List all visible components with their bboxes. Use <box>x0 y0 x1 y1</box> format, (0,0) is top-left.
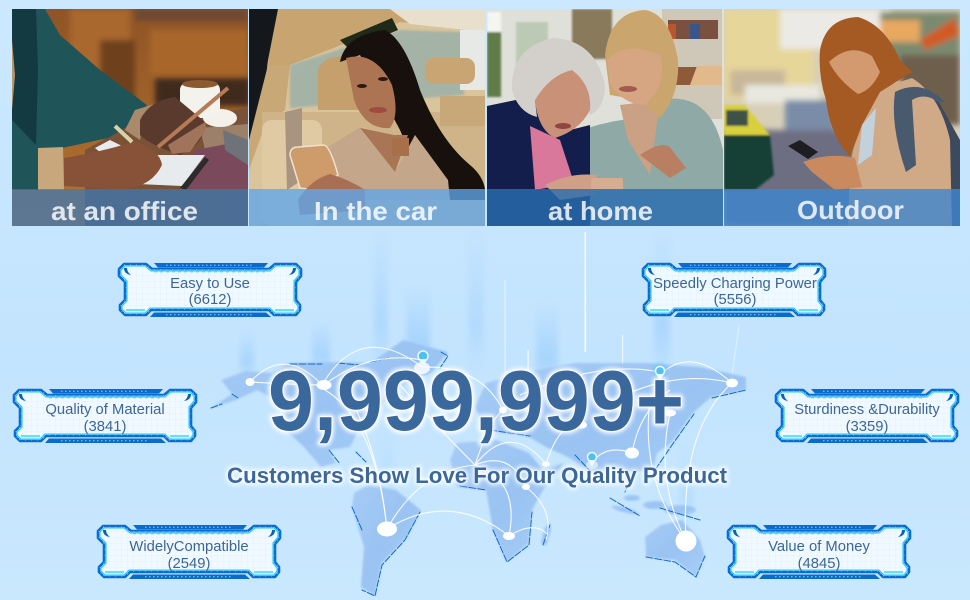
taxi <box>724 105 774 190</box>
jacket <box>848 78 952 226</box>
door pillar <box>249 9 278 150</box>
continent: North America <box>211 340 448 467</box>
badge: Speedly Charging Power: Speedly Charging Power <box>653 276 817 292</box>
badge: Easy to Use: Easy to Use <box>170 276 250 292</box>
hand with pen <box>64 141 162 189</box>
hands <box>640 145 686 178</box>
location pin: north America <box>418 351 428 366</box>
coffee cup <box>180 80 237 127</box>
continent: Australia <box>645 520 705 577</box>
badge: Speedly Charging Power <box>643 263 825 317</box>
cardigan grey-blue <box>582 99 723 226</box>
hair <box>340 30 485 200</box>
caption: In the car <box>314 196 437 226</box>
caption band <box>12 189 248 226</box>
land masses <box>211 340 746 596</box>
location pin: south Asia <box>588 452 596 467</box>
blouse <box>323 128 450 200</box>
sunglasses <box>340 18 398 50</box>
island: Madagascar <box>541 522 551 546</box>
hands <box>803 156 862 190</box>
subheading: Customers Show Love For Our Quality Product <box>227 463 728 488</box>
window <box>487 12 548 97</box>
continent: Eurasia <box>475 363 746 490</box>
badge: Quality of Material: (3841) <box>84 419 126 435</box>
hand with phone <box>140 97 205 155</box>
seat <box>262 112 485 188</box>
blonde hair <box>605 10 678 118</box>
badge: Sturdiness & Durability: (3359) <box>846 419 888 435</box>
islands: Southeast Asia <box>611 495 696 516</box>
badge: Quality of Material: Quality of Material <box>45 402 165 418</box>
headline number: 9,999,999+ <box>268 354 684 449</box>
teal cardigan <box>12 9 147 190</box>
face <box>829 50 880 94</box>
headliner <box>268 9 408 65</box>
beige cuffs <box>38 147 64 190</box>
badge: Value of Money: Value of Money <box>768 539 870 555</box>
badge: Quality of Material <box>14 389 196 443</box>
subheading: Customers Show Love For Our Quality Product <box>227 463 728 488</box>
world map <box>211 340 746 596</box>
photo: in the car <box>249 9 485 226</box>
hair <box>820 17 912 157</box>
continent: South America <box>352 485 421 596</box>
caption: at an office <box>51 196 198 226</box>
light beams <box>240 226 740 530</box>
caption: at home <box>548 196 653 226</box>
caption band <box>724 189 960 226</box>
table <box>85 108 248 226</box>
grey-white hair <box>512 38 605 117</box>
badge: Easy to Use: (6612) <box>189 292 231 308</box>
pink shirt <box>530 126 574 190</box>
phone <box>788 140 818 159</box>
blurred street <box>724 9 960 226</box>
curtain <box>572 9 612 59</box>
caption: Outdoor <box>797 195 904 225</box>
phone <box>290 145 338 190</box>
notebook <box>95 140 205 186</box>
badge: Widely Compatible <box>98 525 280 579</box>
coastline accents <box>211 352 746 596</box>
caption band <box>487 189 723 226</box>
face <box>346 57 396 128</box>
location pin: east Asia <box>652 362 668 381</box>
photo: at home <box>487 9 723 226</box>
headline number: 9,999,999+ <box>268 354 684 449</box>
badge: Value of Money <box>728 525 910 579</box>
navy cardigan <box>487 97 590 226</box>
caption band <box>249 189 485 226</box>
bookshelf <box>662 9 722 119</box>
badge: Sturdiness & Durability <box>776 389 958 443</box>
backpack <box>893 85 960 226</box>
rear window <box>290 30 464 108</box>
city nodes <box>246 362 738 552</box>
badge: Widely Compatible: WidelyCompatible <box>129 539 249 555</box>
badge: Widely Compatible: (2549) <box>168 556 210 572</box>
blonde face <box>607 49 662 105</box>
continent: Africa <box>450 440 564 562</box>
connection arcs <box>250 347 732 541</box>
badge: Speedly Charging Power: (5556) <box>714 292 756 308</box>
photo: at an office <box>12 9 250 226</box>
badge: Sturdiness & Durability: Sturdiness &Durability <box>794 402 940 418</box>
elderly face <box>535 70 590 138</box>
badge: Value of Money: (4845) <box>798 556 840 572</box>
hand <box>298 174 365 215</box>
badge: Easy to Use <box>119 263 301 317</box>
photo: outdoor <box>724 9 960 226</box>
